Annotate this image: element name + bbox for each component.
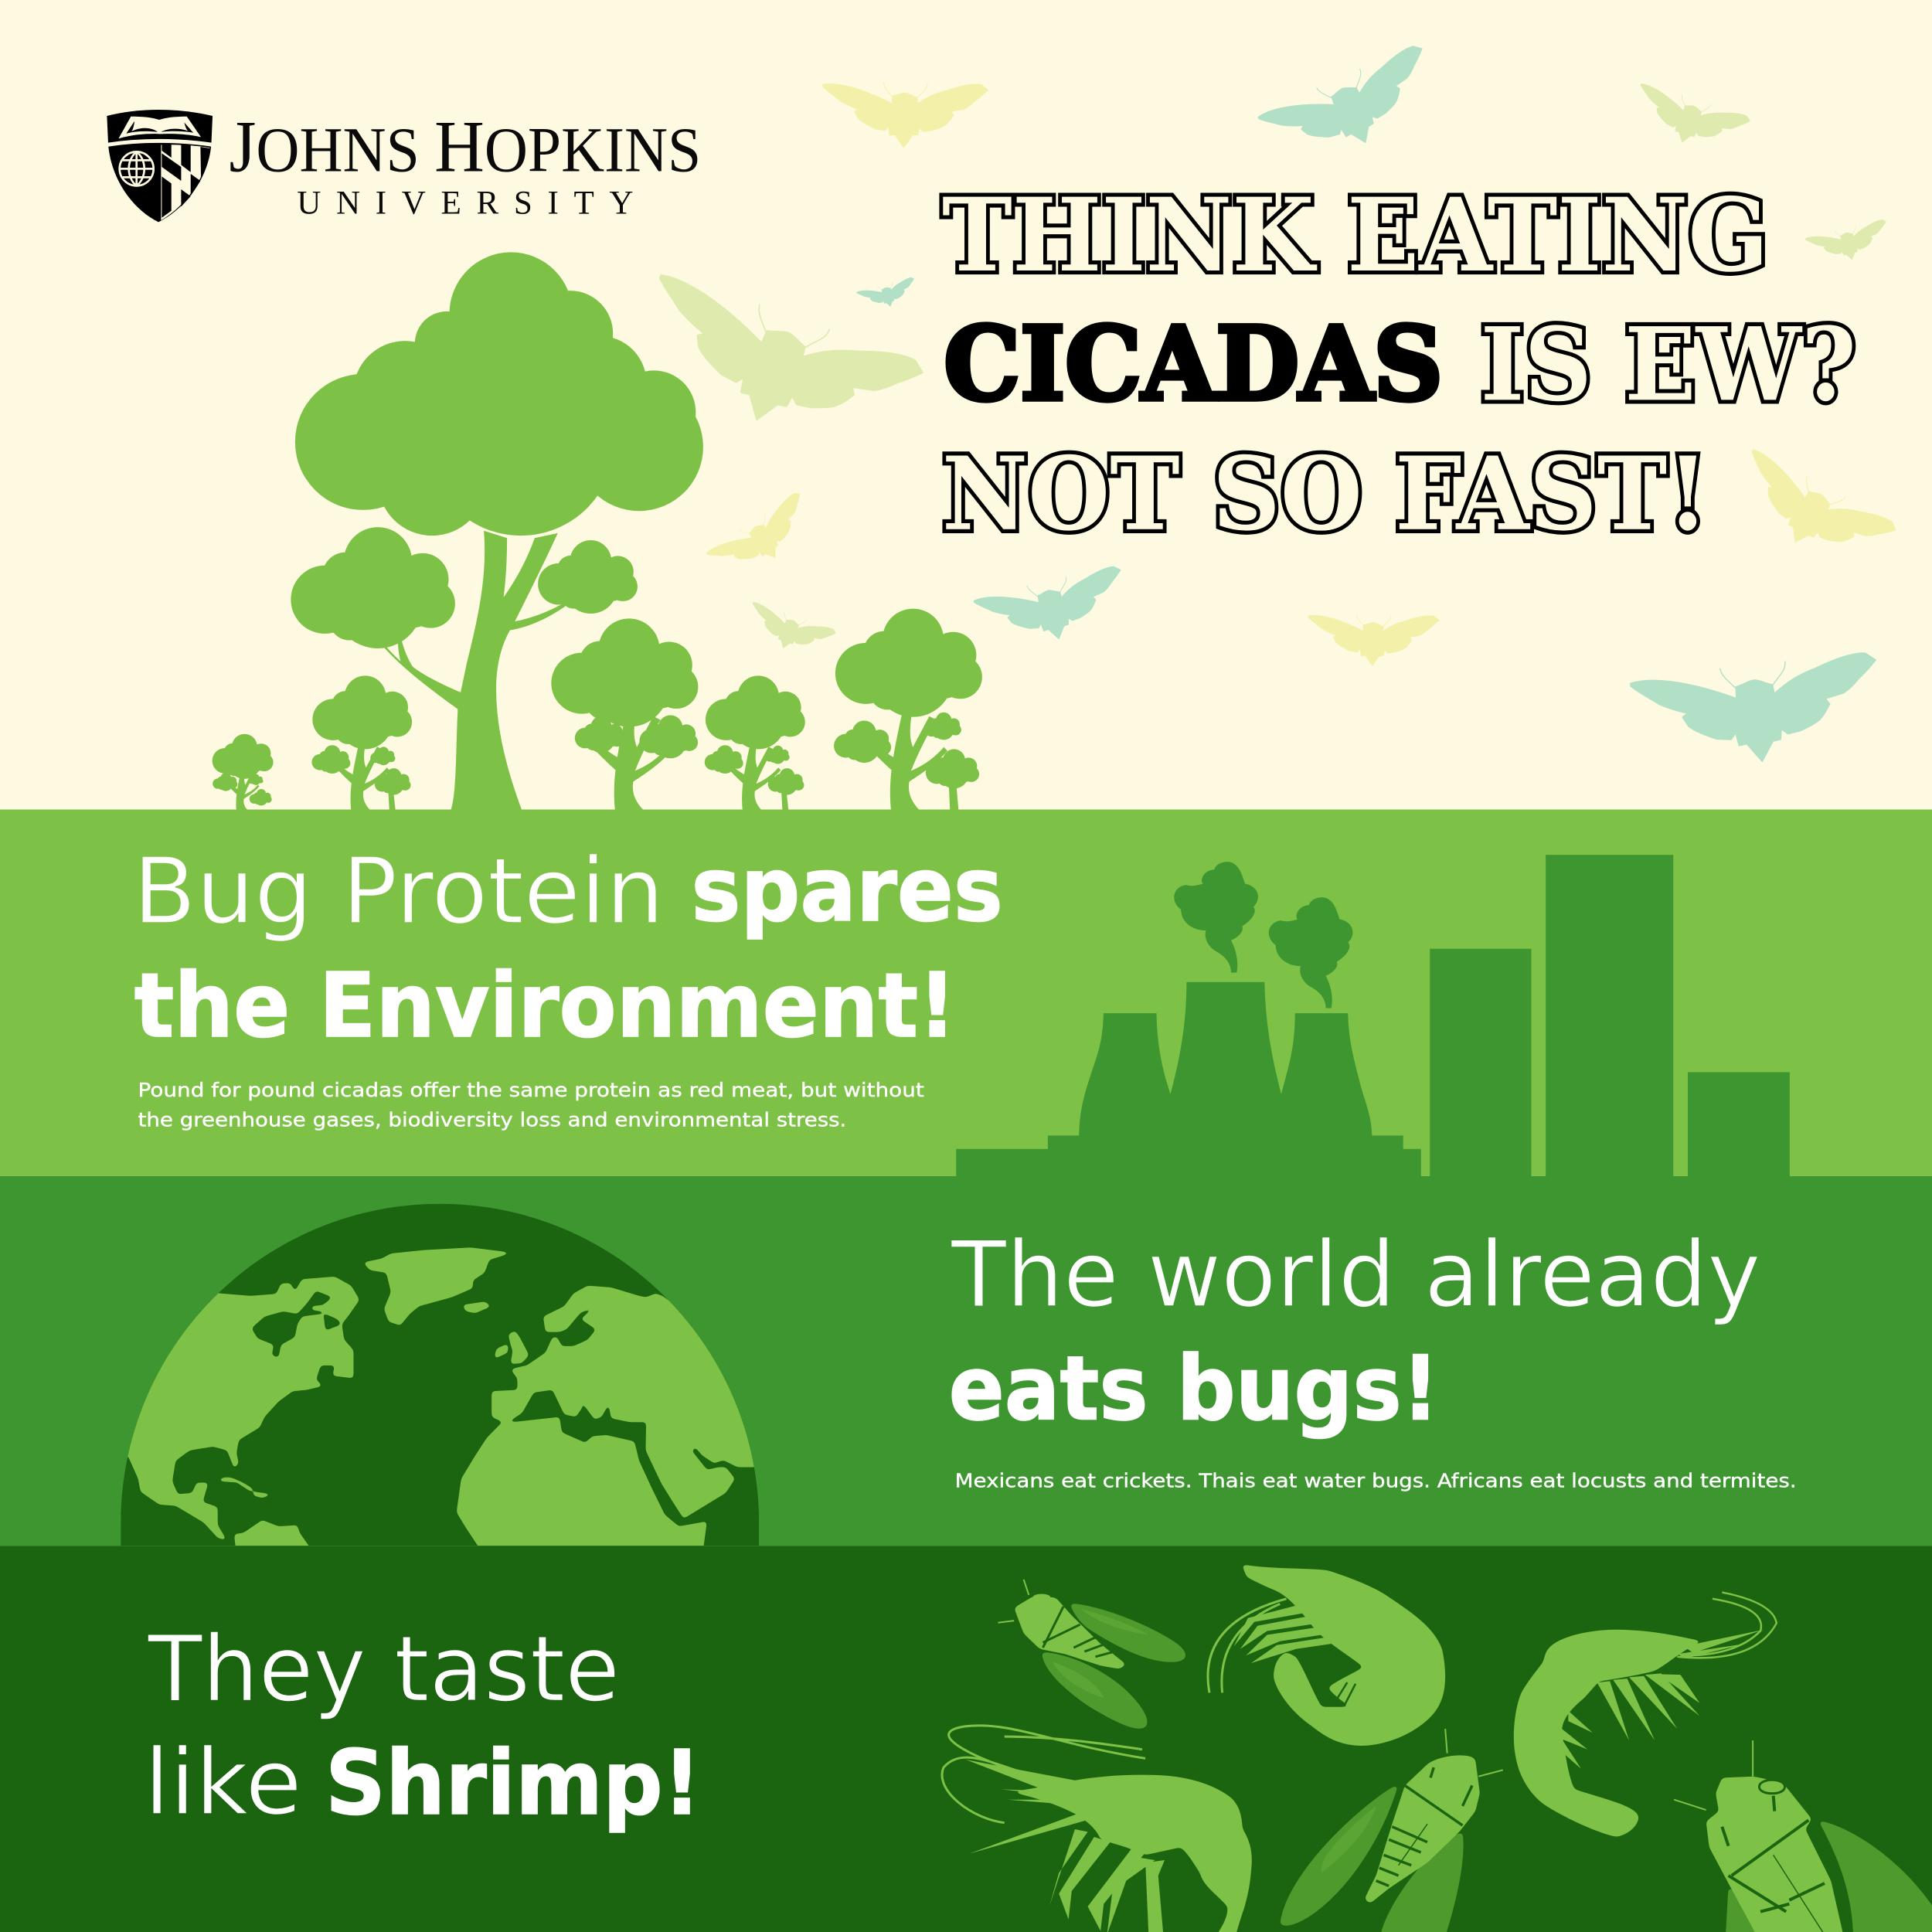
wordmark: university: UNIVERSITY (297, 185, 634, 222)
Africa (457, 1417, 707, 1556)
body text (138, 1079, 924, 1131)
logo: Johns Hopkins University (107, 106, 701, 222)
heading: eats bugs! (949, 1338, 1439, 1441)
cicada big pale green (624, 257, 926, 471)
Eurasia (492, 1286, 826, 1519)
shrimp 2 (1514, 1592, 1777, 1837)
heading: the Environment! (134, 954, 956, 1058)
cicada teal mid (972, 566, 1130, 651)
heading: They taste (147, 1615, 620, 1722)
heading: Shrimp! (325, 1732, 701, 1835)
heading (949, 1221, 1760, 1441)
illustration: shrimps and cicadas (942, 1564, 1932, 1932)
body text: Mexicans eat crickets. Thais eat water bugs. Africans eat locusts and termites. (955, 1469, 1797, 1492)
cicada yellow right (1723, 440, 1898, 583)
Caribbean islands (221, 1478, 268, 1498)
heading: Bug Protein (133, 838, 664, 944)
South America (234, 1520, 316, 1556)
heading: spares (691, 838, 1003, 942)
icon: university shield (107, 110, 213, 222)
cicada yellow lower (1305, 607, 1439, 671)
Hudson Bay (251, 1291, 342, 1358)
shrimp 1 (1208, 1564, 1445, 1746)
panel: the world already eats bugs (0, 1176, 1932, 1556)
cicada yellow mid (702, 491, 821, 587)
title line 2 bold word: CICADAS (944, 304, 1443, 423)
decorative cicadas (624, 43, 1898, 768)
shrimp 3 (942, 1726, 1252, 1932)
cicada 1 (998, 1580, 1186, 1729)
icon: factory and buildings (956, 855, 1790, 1177)
cicada 2 (1280, 1729, 1503, 1932)
Britain and Ireland (494, 1331, 529, 1364)
cicada pale green mid (741, 597, 837, 665)
title line 1: THINK EATING (942, 175, 1769, 294)
cicada teal top (1254, 43, 1446, 174)
body text: the greenhouse gases, biodiversity loss and environmental stress. (138, 1108, 846, 1131)
panel: they taste like shrimp (0, 1546, 1932, 1932)
cicada 3 (1674, 1740, 1932, 1932)
main tree (291, 252, 703, 810)
title line 3: NOT SO FAST! (942, 434, 1709, 553)
Greenland (363, 1247, 512, 1325)
icon: globe (121, 1204, 759, 1546)
wordmark: JOHNS HOPKINS (230, 106, 701, 188)
heading (145, 1615, 701, 1835)
background: cream sky (0, 0, 1932, 810)
cicada big teal (1630, 652, 1881, 768)
title (942, 175, 1856, 553)
tree A (551, 618, 698, 811)
heading (133, 838, 1003, 1058)
cicada pale green top right (1627, 76, 1751, 162)
tree E (213, 734, 274, 811)
panel: bug protein spares the environment (0, 810, 1932, 1177)
cicada pale green right (1804, 219, 1891, 267)
title line 2 outline: IS EW? (1481, 304, 1856, 423)
cicada teal small (855, 277, 918, 312)
forest of trees (213, 252, 982, 811)
Iceland (464, 1301, 489, 1313)
tree C (705, 675, 805, 811)
tree B (311, 675, 412, 811)
icon: smoke (1174, 862, 1352, 1008)
tree D (834, 609, 982, 811)
heading: like (145, 1729, 302, 1835)
cicada yellow top (818, 73, 988, 154)
body text: Pound for pound cicadas offer the same protein as red meat, but without (138, 1079, 924, 1101)
North America (128, 1277, 359, 1539)
heading: The world already (951, 1221, 1760, 1328)
